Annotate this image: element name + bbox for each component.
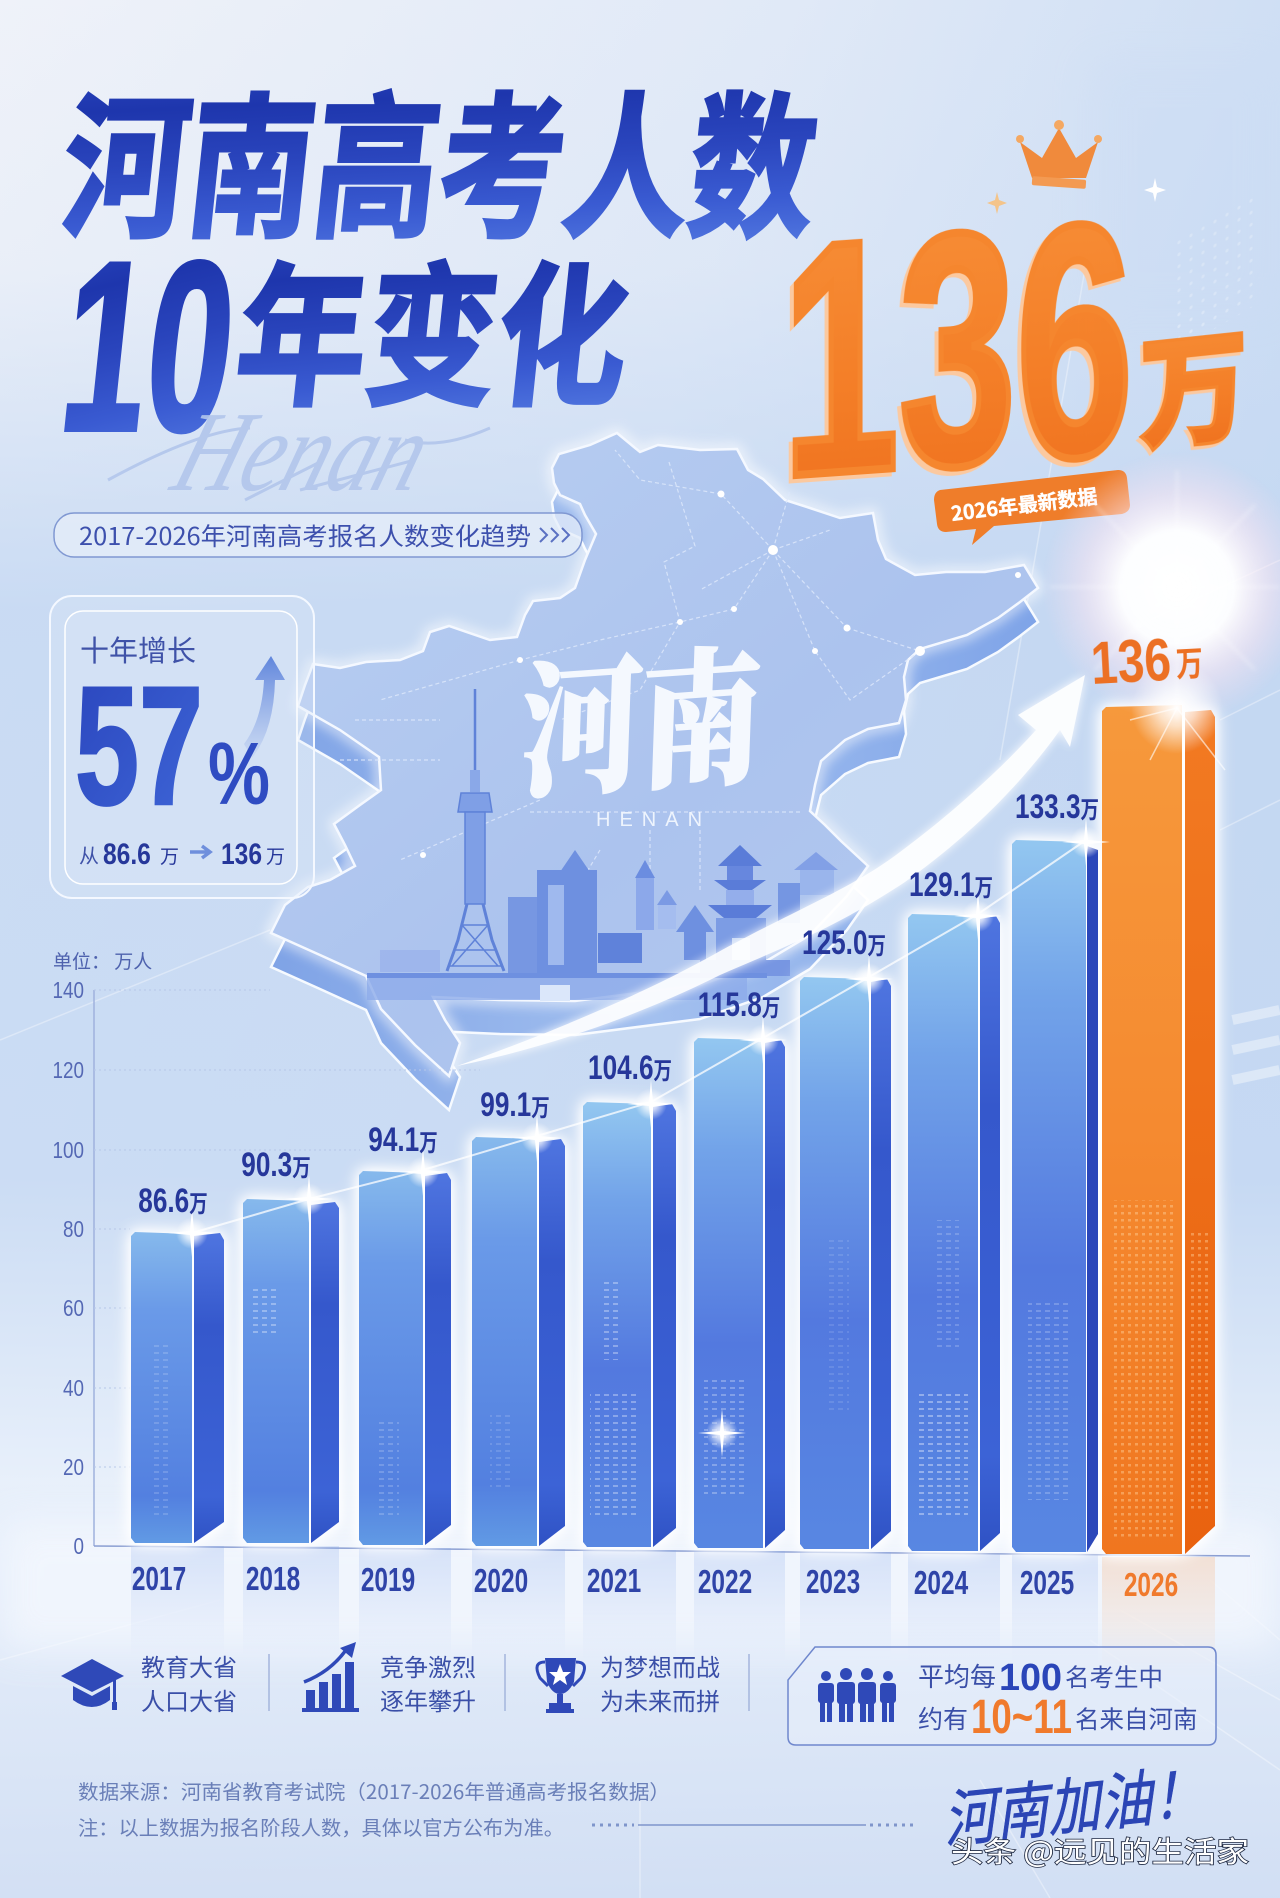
- subtitle pill: 2017-2026年河南高考报名人数变化趋势: [79, 518, 531, 553]
- growth percent: 57: [75, 652, 203, 841]
- bar 2020: [472, 1137, 565, 1546]
- line two: 10~11: [971, 1691, 1072, 1744]
- chevrons: [540, 528, 569, 542]
- feature: education province: [61, 1648, 237, 1717]
- line two: 名来自河南: [1075, 1701, 1198, 1736]
- from 86.6 to 136: 136: [221, 837, 262, 871]
- year labels: 2022: [698, 1565, 752, 1601]
- bar 2021: [583, 1102, 676, 1547]
- title number 10: 10: [51, 212, 247, 482]
- sparkles on bar tops: [168, 818, 1110, 1257]
- axis labels: 0: [74, 1534, 84, 1559]
- year labels: 2017: [132, 1562, 186, 1598]
- map extruded side: [271, 467, 1038, 1110]
- year labels: 2020: [474, 1564, 528, 1600]
- label 2025: 133.3万: [1015, 789, 1099, 826]
- map network lines: [340, 450, 920, 900]
- axis labels: 80: [63, 1217, 84, 1242]
- bar 2022: [694, 1038, 785, 1548]
- unit label: 单位： 万人: [53, 947, 152, 974]
- year labels: 2023: [806, 1565, 860, 1601]
- from 86.6 to 136: 万: [160, 842, 179, 869]
- line one: 平均每: [918, 1657, 996, 1694]
- icon: people: [818, 1668, 896, 1722]
- label 2018: 90.3万: [241, 1147, 311, 1184]
- icon: trophy: [537, 1658, 585, 1713]
- thin trend line: [192, 840, 1086, 1233]
- axis labels: 100: [53, 1138, 84, 1163]
- line one: [918, 1657, 1163, 1699]
- bar reflections: [131, 1546, 1215, 1677]
- axis labels: 140: [53, 978, 84, 1003]
- Henan province map: [271, 433, 1038, 1110]
- headline unit: 万: [1138, 288, 1250, 475]
- Henan script signature: Henan: [158, 388, 446, 515]
- text: 教育大省: [141, 1648, 237, 1683]
- icon: rising chart: [302, 1642, 359, 1712]
- data source footer: 数据来源：河南省教育考试院（2017-2026年普通高考报名数据）: [78, 1776, 670, 1805]
- from 86.6 to 136: 万: [266, 842, 285, 869]
- label 2017: 86.6万: [138, 1183, 208, 1220]
- axis labels: 120: [53, 1058, 84, 1083]
- label 2026: 136: [1089, 626, 1173, 697]
- bar 2025: [1012, 840, 1098, 1552]
- axis labels: 60: [63, 1296, 84, 1321]
- year labels: [132, 1562, 1178, 1604]
- chart axis: [53, 978, 1250, 1559]
- bar 2017: [131, 1232, 224, 1543]
- skyline: [367, 845, 838, 1001]
- bar 2018: [243, 1199, 339, 1543]
- axis labels: 20: [63, 1455, 84, 1480]
- year labels: 2021: [587, 1564, 641, 1600]
- line one: 名考生中: [1065, 1659, 1163, 1694]
- note footer: 注：以上数据为报名阶段人数，具体以官方公布为准。: [78, 1812, 564, 1841]
- bar 2019: [359, 1171, 451, 1545]
- bar 2023: [800, 977, 891, 1549]
- text: 竞争激烈: [380, 1648, 476, 1683]
- small arrow: [190, 846, 210, 858]
- feature: competition: [302, 1642, 476, 1717]
- line two: 约有: [918, 1700, 968, 1736]
- bar 2024: [908, 914, 1000, 1551]
- line one: 100: [999, 1657, 1062, 1699]
- feature: dreams: 为未来而拼: [600, 1682, 720, 1717]
- percent sign: %: [208, 724, 270, 823]
- crown icon: [987, 120, 1166, 214]
- feature: education province: 人口大省: [141, 1682, 237, 1717]
- from 86.6 to 136: 86.6: [103, 837, 151, 871]
- from 86.6 to 136: 从: [79, 840, 99, 869]
- handwritten slogan: 河南加油！: [942, 1742, 1216, 1861]
- label 2020: 99.1万: [480, 1087, 550, 1124]
- year labels: 2018: [246, 1562, 300, 1598]
- label 2019: 94.1万: [368, 1122, 438, 1159]
- label 2023: 125.0万: [802, 925, 886, 962]
- dotted divider: [592, 1824, 914, 1826]
- feature: competition: 逐年攀升: [380, 1682, 476, 1717]
- from 86.6 to 136: [79, 837, 285, 871]
- bar chart: [131, 705, 1215, 1554]
- label 2021: 104.6万: [588, 1050, 672, 1087]
- axis labels: 40: [63, 1376, 84, 1401]
- subtitle pill: [54, 513, 582, 557]
- main growth arrow: [457, 675, 1085, 1066]
- map top surface: [271, 433, 1038, 1076]
- icon: graduation cap: [61, 1659, 124, 1710]
- value labels: [138, 624, 1205, 1220]
- bar 2026: [1102, 705, 1215, 1554]
- watermark: 头条 @远见的生活家: [951, 1829, 1249, 1871]
- map name latin: HENAN: [596, 809, 711, 831]
- feature: dreams: [537, 1648, 720, 1717]
- map name calligraphy: 河南: [519, 598, 765, 827]
- growth arrow: [244, 656, 285, 758]
- label 2024: 129.1万: [909, 867, 993, 904]
- glow burst above 2026: [1042, 452, 1280, 770]
- year labels: 2024: [914, 1566, 968, 1602]
- text: 为梦想而战: [600, 1648, 720, 1683]
- year labels: 2026: [1124, 1568, 1178, 1604]
- year labels: 2019: [361, 1563, 415, 1599]
- title line 1: 河南高考人数: [53, 44, 829, 270]
- axis labels: [53, 978, 84, 1559]
- label 2026: 万: [1175, 644, 1204, 684]
- badge: 2026 latest data: 2026年最新数据: [949, 480, 1099, 527]
- panel: ten-year growth: [50, 596, 314, 898]
- TV tower: [447, 689, 504, 971]
- line two: [918, 1691, 1198, 1744]
- growth label: 十年增长: [80, 628, 196, 670]
- year labels: 2025: [1020, 1566, 1074, 1602]
- panel: 10-11 of every 100: [788, 1647, 1216, 1745]
- label 2022: 115.8万: [698, 987, 780, 1024]
- badge: 2026 latest data: [934, 470, 1130, 545]
- map glow edge: [271, 433, 1038, 1076]
- title words: 年变化: [227, 216, 641, 437]
- data-style stripes, right edge: [1231, 1005, 1280, 1085]
- title line 2: [51, 212, 641, 482]
